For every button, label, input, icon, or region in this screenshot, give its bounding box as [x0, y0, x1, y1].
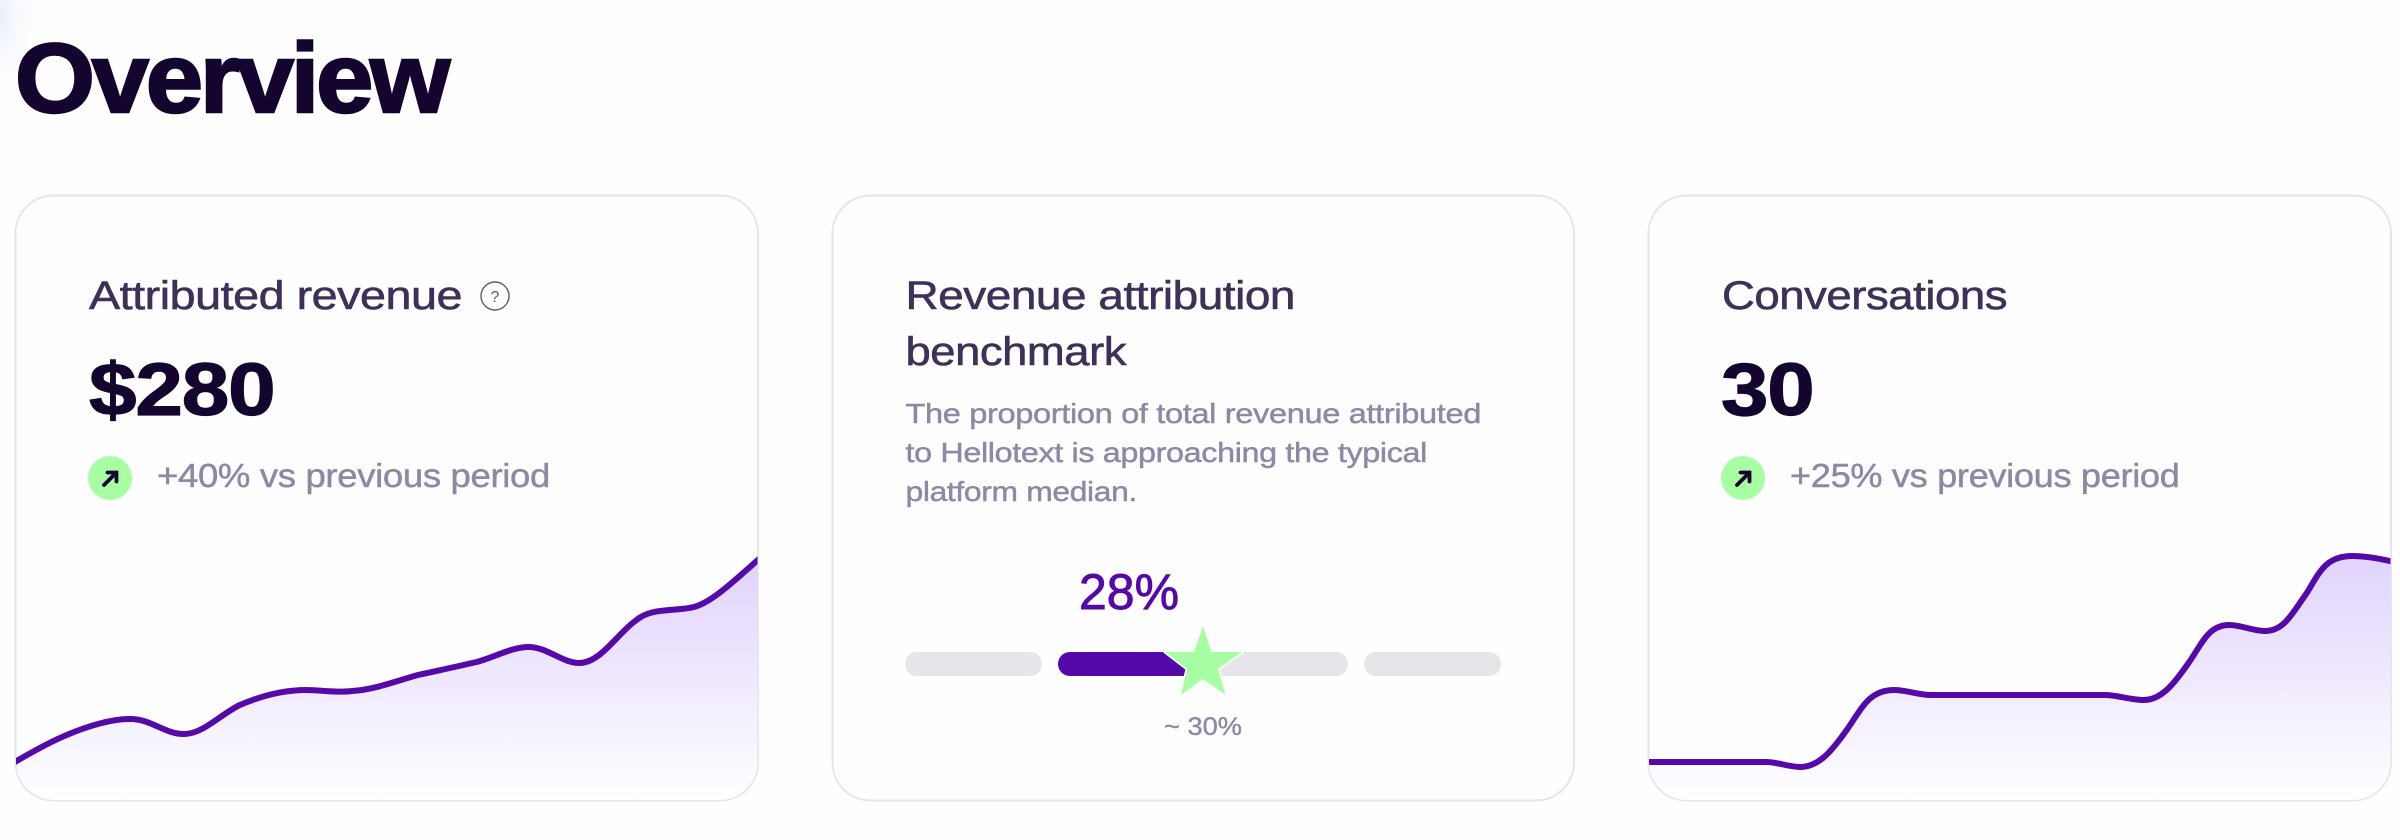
benchmark bar: [905, 652, 1501, 676]
heading: benchmark: benchmark: [906, 330, 1128, 374]
heading: benchmark: [906, 274, 1295, 374]
area chart: conversations: [1645, 556, 2394, 805]
panel: conversations: [1645, 196, 2394, 805]
card background: [832, 196, 1574, 800]
description text: platform median.: [906, 476, 1137, 507]
description text: [906, 398, 1481, 507]
panel: revenue attribution benchmark: [832, 196, 1574, 800]
description text: The proportion of total revenue attributed: [906, 398, 1481, 429]
icon: trend up arrow: [1721, 456, 1765, 500]
heading: conversations: Conversations: [1722, 274, 2007, 318]
panel: attributed revenue: [10, 196, 761, 805]
metric: 28 percent: 28%: [1079, 564, 1179, 620]
trend text: +25% vs previous period: [1790, 457, 2180, 494]
card background: [1648, 196, 2391, 800]
card background: [16, 196, 758, 800]
trend text: +40% vs previous period: [157, 457, 550, 494]
label: about 30 percent: ~ 30%: [1164, 713, 1242, 741]
heading: attributed revenue: Attributed revenue: [89, 274, 462, 318]
title: Overview: [15, 23, 451, 133]
icon: help: ?: [491, 289, 500, 306]
metric: revenue value: $280: [89, 348, 274, 431]
icon: benchmark star: [1165, 626, 1242, 695]
icon: trend up arrow: [88, 456, 132, 500]
icon: help: [481, 282, 509, 310]
description text: to Hellotext is approaching the typical: [906, 437, 1427, 468]
metric: conversations value: 30: [1721, 348, 1814, 431]
heading: benchmark: Revenue attribution: [906, 274, 1295, 318]
area chart: revenue: [10, 557, 761, 805]
